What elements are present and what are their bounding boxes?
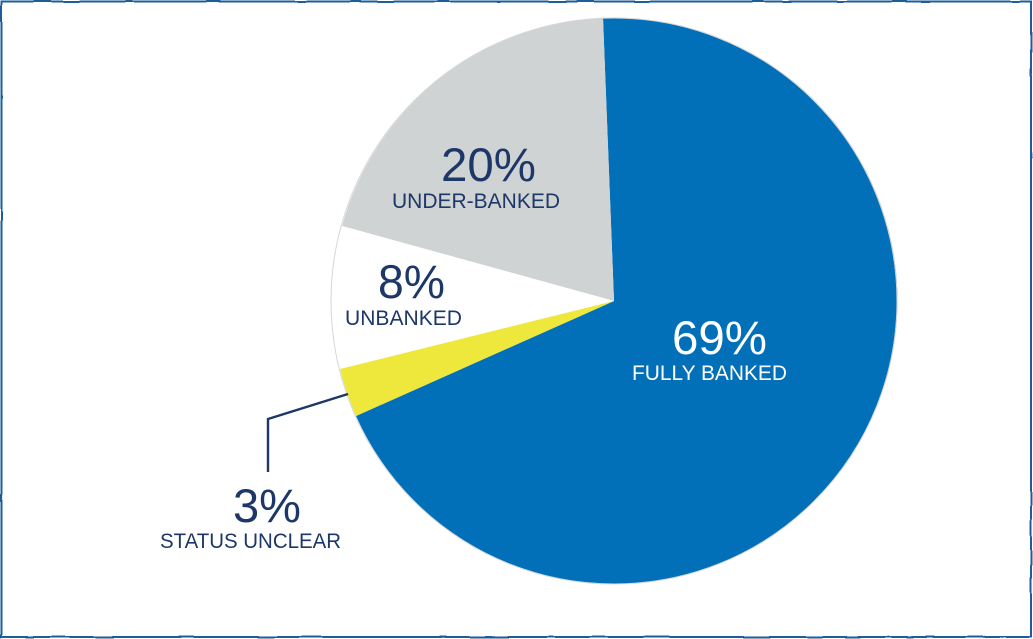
label: 3% status unclear (160, 479, 341, 553)
slice: unbanked 8% (332, 226, 614, 369)
label: 8% unbanked (345, 255, 462, 330)
slice: fully banked 69% (356, 18, 897, 584)
pie chart (331, 18, 897, 584)
leader line for status unclear (268, 394, 348, 472)
label: 69% fully banked: 69% (672, 311, 767, 364)
label: 3% status unclear: 3% (233, 479, 301, 532)
label: 20% under-banked (392, 138, 560, 213)
label: 8% unbanked: UNBANKED (345, 307, 462, 330)
slice: status unclear 3% (340, 301, 614, 416)
label: 3% status unclear: STATUS UNCLEAR (160, 530, 341, 553)
label: 69% fully banked (632, 311, 787, 385)
label: 8% unbanked: 8% (378, 255, 445, 308)
slice: under-banked 20% (342, 18, 614, 301)
label: 69% fully banked: FULLY BANKED (632, 362, 787, 385)
label: 20% under-banked: 20% (441, 138, 536, 191)
label: 20% under-banked: UNDER-BANKED (392, 190, 560, 213)
pie outline (331, 18, 897, 584)
